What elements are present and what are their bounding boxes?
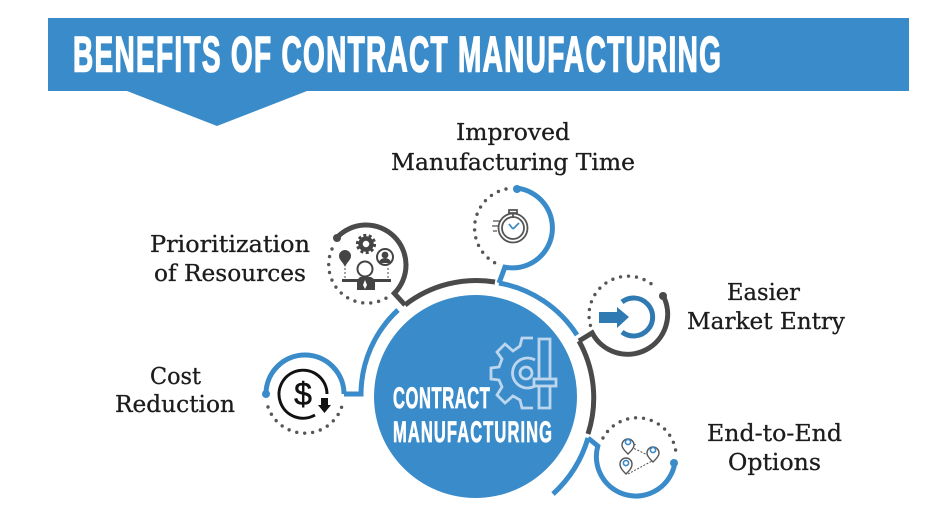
label: end-to-end options: [707, 421, 842, 476]
label: end-to-end options: End-to-End: [707, 421, 842, 447]
connector ring: gray top-left: [405, 280, 495, 305]
label: improved manufacturing time: Manufacturing Time: [391, 150, 635, 176]
connector ring: blue top-right: [499, 283, 577, 335]
label: prioritization of resources: of Resources: [154, 261, 306, 287]
icon: gear and wrench: [491, 338, 556, 408]
label: cost reduction: [115, 364, 235, 418]
connector ring: blue left: [344, 310, 398, 394]
label: easier market entry: [687, 280, 845, 335]
icon: dollar with down arrow: $: [294, 376, 312, 412]
connector ring: gray right: [579, 341, 594, 434]
title banner: [48, 18, 909, 126]
icon: arrow into ring: [599, 298, 653, 336]
label: prioritization of resources: [150, 232, 310, 287]
label: improved manufacturing time: Improved: [456, 120, 570, 146]
node: easier market entry: [579, 276, 668, 354]
label: prioritization of resources: Prioritization: [150, 232, 310, 258]
label: end-to-end options: Options: [728, 450, 821, 476]
icon: person balancing gear, bulb and user: [339, 235, 393, 290]
icon: stopwatch: [492, 210, 528, 242]
connector ring: blue lower-right: [553, 438, 588, 494]
node: end-to-end options: [588, 418, 678, 496]
central label: CONTRACT: [393, 382, 490, 415]
central label: [393, 382, 552, 449]
label: cost reduction: Reduction: [115, 392, 235, 418]
node: cost reduction: [262, 355, 344, 433]
label: improved manufacturing time: [391, 120, 635, 176]
label: easier market entry: Easier: [727, 280, 800, 306]
central label: MANUFACTURING: [393, 416, 552, 449]
title: BENEFITS OF CONTRACT MANUFACTURING: [73, 26, 721, 83]
icon: location pins: [620, 439, 659, 474]
central circle: contract manufacturing: [374, 295, 577, 498]
label: cost reduction: Cost: [150, 364, 202, 390]
node: prioritization of resources: [329, 225, 406, 305]
node: improved manufacturing time: [475, 185, 552, 283]
label: easier market entry: Market Entry: [687, 309, 845, 335]
